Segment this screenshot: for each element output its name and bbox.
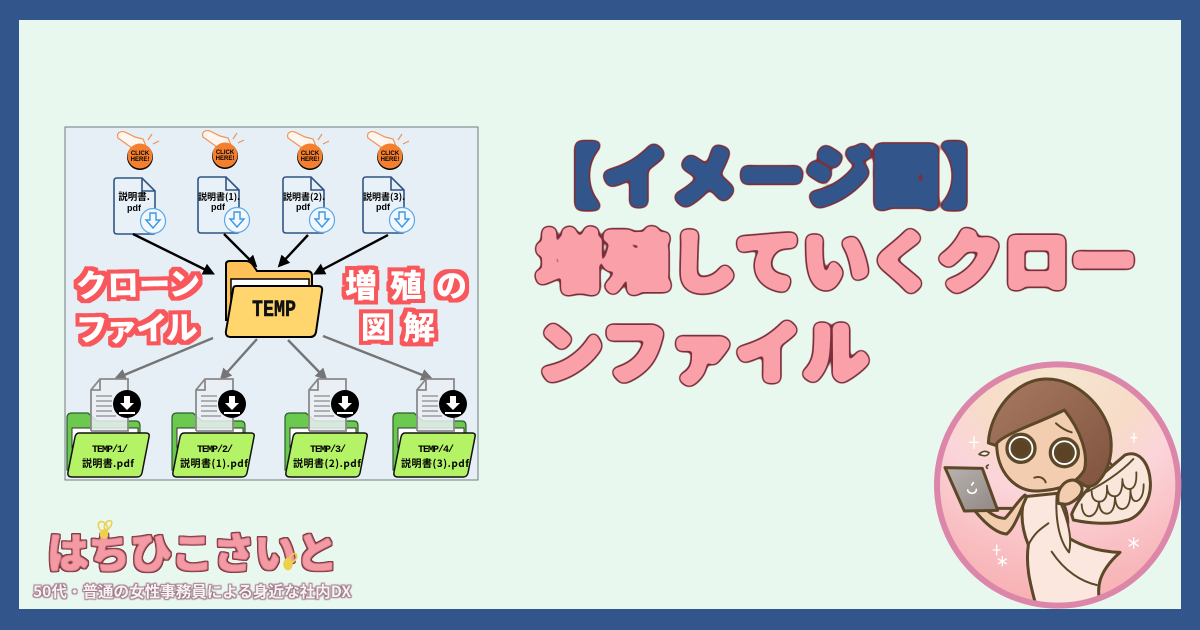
- output folder 2: TEMP/2/: [197, 444, 233, 456]
- output folder 1: [67, 379, 149, 477]
- output folder 3: TEMP/3/: [310, 444, 346, 456]
- click here icons: HERE!: [301, 157, 319, 163]
- sweat marks: [979, 451, 989, 468]
- click here icons: HERE!: [216, 156, 234, 162]
- output folder 1: 説明書.pdf: [82, 455, 135, 470]
- output folder 3: [285, 379, 367, 477]
- click here icons: HERE!: [381, 157, 399, 163]
- arm: [972, 495, 1027, 534]
- red label: proliferation diagram: 図: [361, 303, 391, 347]
- output folder 2: [172, 379, 254, 477]
- brow and mouth: [1034, 423, 1072, 482]
- TEMP folder icon: TEMP: [252, 297, 296, 323]
- dress: [1022, 493, 1120, 608]
- source pdf documents: [114, 177, 414, 234]
- click here icons: [118, 131, 409, 170]
- output folder 4: [393, 379, 475, 477]
- arrows into TEMP folder: [133, 234, 388, 273]
- ponytail: [1110, 462, 1112, 466]
- source pdf documents: pdf: [127, 203, 142, 213]
- source pdf documents: 説明書(2).: [283, 190, 325, 203]
- red label: proliferation diagram: の: [436, 261, 467, 306]
- red label: clone file: [75, 259, 201, 351]
- source pdf documents: 説明書.: [118, 189, 150, 203]
- source pdf documents: 説明書(1).: [198, 190, 240, 203]
- hair: [988, 379, 1111, 486]
- title: main heading: ンファイル: [536, 300, 869, 397]
- source pdf documents: pdf: [211, 202, 226, 212]
- red label: proliferation diagram: 増: [345, 261, 377, 307]
- title: main heading: 増殖していくクロー: [536, 209, 1137, 306]
- face: [997, 410, 1085, 491]
- panel: clone file diagram: [65, 127, 478, 480]
- click here icons: CLICK: [381, 151, 400, 157]
- output folder 4: 説明書(3).pdf: [401, 455, 470, 470]
- TEMP folder icon: [226, 261, 322, 337]
- sleeve folds: [1028, 495, 1097, 585]
- red label: proliferation diagram: [345, 261, 467, 349]
- wing: [1072, 454, 1150, 523]
- red label: clone file: クローン: [75, 259, 201, 307]
- red label: proliferation diagram: 解: [403, 303, 435, 349]
- sparkles: [969, 433, 1138, 566]
- source pdf documents: 説明書(3).: [363, 190, 405, 203]
- output folder 3: 説明書(2).pdf: [293, 455, 362, 470]
- title: image label: 【イメージ図】: [534, 124, 1009, 221]
- source pdf documents: pdf: [296, 202, 311, 212]
- logo: site name: はちひこさいと: [47, 520, 338, 580]
- click here icons: CLICK: [301, 151, 320, 157]
- output folder 2: 説明書(1).pdf: [180, 455, 249, 470]
- click here icons: CLICK: [216, 150, 235, 156]
- output folder 4: TEMP/4/: [418, 444, 454, 456]
- arrows out to numbered folders: [117, 336, 430, 378]
- click here icons: HERE!: [131, 157, 149, 163]
- eyes: [1007, 434, 1078, 467]
- icon: bees on logo: [96, 519, 298, 570]
- title: main heading: [536, 209, 1137, 397]
- source pdf documents: pdf: [376, 202, 391, 212]
- click here icons: CLICK: [131, 151, 150, 157]
- tablet: [945, 468, 1012, 511]
- hand on cheek: [1058, 480, 1082, 504]
- output folder 1: TEMP/1/: [92, 444, 128, 456]
- red label: proliferation diagram: 殖: [390, 261, 422, 307]
- illustration: angel with tablet badge: [937, 364, 1178, 608]
- red label: clone file: ファイル: [75, 303, 198, 351]
- logo: tagline: 50代・普通の女性事務員による身近な社内DX: [33, 580, 351, 602]
